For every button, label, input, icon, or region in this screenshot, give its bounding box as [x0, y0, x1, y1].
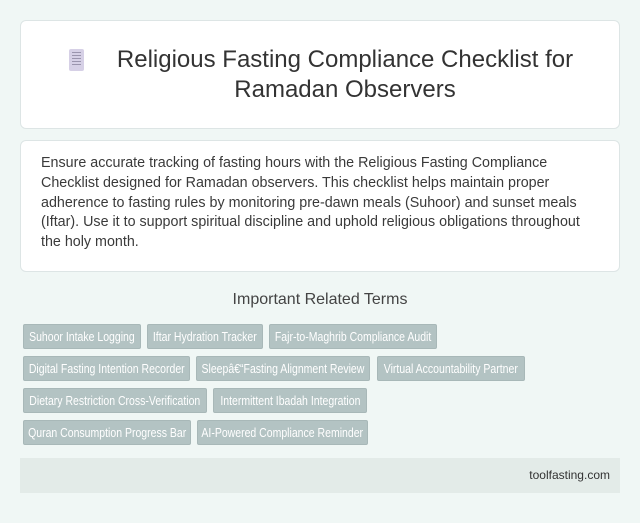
tags: AI-Powered Compliance Reminder [202, 426, 363, 440]
title: Religious Fasting Compliance Checklist for Ramadan Observers [117, 46, 573, 103]
footer [20, 458, 620, 493]
tags: Digital Fasting Intention Recorder [29, 362, 184, 376]
tags: Dietary Restriction Cross-Verification [30, 394, 200, 408]
tags: Quran Consumption Progress Bar [28, 426, 186, 440]
heading: related terms: Important Related Terms [233, 291, 407, 308]
description text: Ensure accurate tracking of fasting hours with the Religious Fasting Compliance Checklist designed for Ramadan observers. This checklist helps maintain proper adherence to fasting rules by monitoring pre-dawn meals (Suhoor) and sunset meals (Iftar). Use it to support spiritual discipline and uphold religious obligations throughout the holy month. [41, 155, 580, 250]
footer text: toolfasting.com [529, 468, 610, 482]
description card [20, 140, 620, 272]
header card [20, 20, 620, 129]
tags: Intermittent Ibadah Integration [220, 394, 360, 408]
tags: Suhoor Intake Logging [29, 330, 135, 344]
tags: Virtual Accountability Partner [384, 362, 518, 376]
icon: document [69, 49, 84, 71]
tags: Iftar Hydration Tracker [153, 330, 257, 344]
tags: Fajr-to-Maghrib Compliance Audit [275, 330, 431, 344]
tags: Sleepâ€“Fasting Alignment Review [202, 362, 364, 376]
